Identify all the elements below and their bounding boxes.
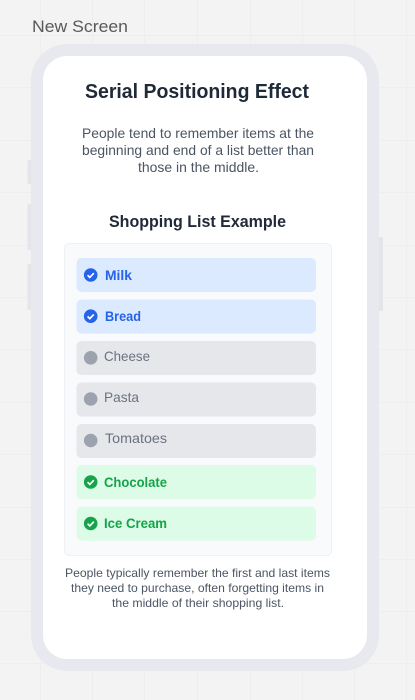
screen label: New Screen [32,17,128,36]
list item: Tomatoes [76,424,316,458]
description [82,125,314,175]
list item: Ice Cream: Ice Cream [104,515,167,531]
list item: Bread: Bread [105,308,141,324]
footer note: they need to purchase, often forgetting items in [71,581,324,595]
phone screen [43,56,367,659]
description: beginning and end of a list better than [82,142,314,158]
list item: Tomatoes: Tomatoes [105,430,167,446]
list item: Milk [76,258,316,292]
title: Serial Positioning Effect [85,81,309,103]
description: those in the middle. [138,159,259,175]
footer note [65,566,330,610]
section heading: Shopping List Example [109,213,286,231]
phone side buttons [28,160,383,311]
list item: Bread [76,300,316,334]
description: People tend to remember items at the [82,125,314,141]
list item: Milk: Milk [105,267,132,283]
list item: Ice Cream [76,506,316,540]
footer note: the middle of their shopping list. [112,596,284,610]
list item: Chocolate: Chocolate [104,474,167,490]
list item: Cheese [76,341,316,375]
list item: Cheese: Cheese [104,348,150,364]
footer note: People typically remember the first and last items [65,566,330,580]
phone frame [31,44,379,671]
panel: shopping list [64,244,332,556]
list item: Pasta: Pasta [104,389,139,405]
phone mockup [28,44,383,671]
list item: Pasta [76,382,316,416]
list item: Chocolate [76,465,316,499]
